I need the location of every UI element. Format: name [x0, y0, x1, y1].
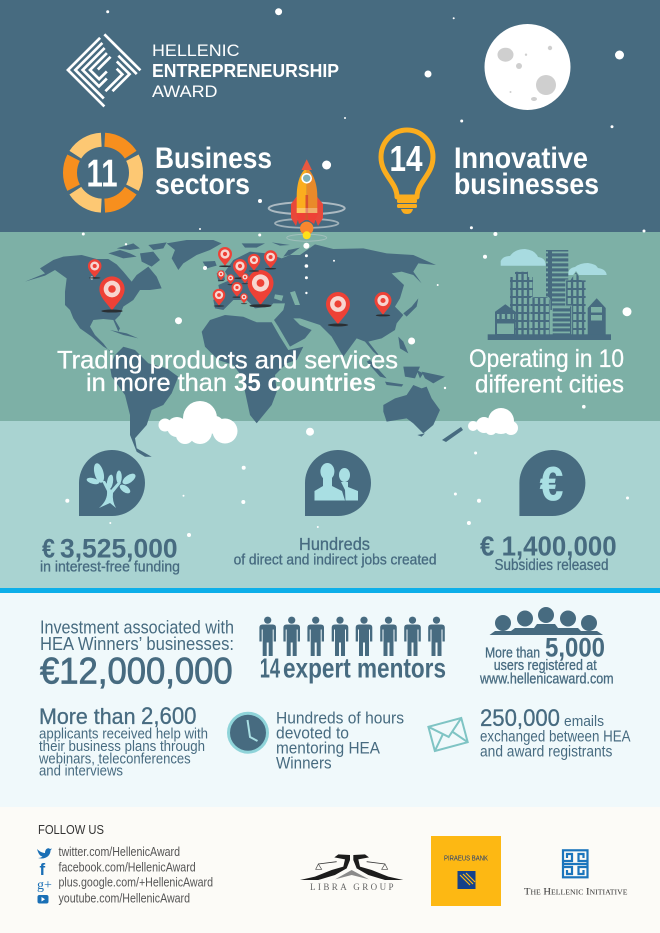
text: mentoring hours: Hundreds of hours: [276, 709, 404, 727]
cloud left: [158, 401, 238, 444]
stat: 11 business sectors: sectors: [155, 168, 250, 201]
text: emails: and award registrants: [480, 744, 613, 761]
icon: twitter: [37, 848, 52, 859]
icon: clock: [227, 712, 269, 754]
text: registered users: [479, 633, 614, 687]
map pins: [88, 247, 392, 326]
africa: [202, 315, 303, 423]
logo: [68, 34, 339, 106]
south america: [110, 347, 178, 457]
logo wordmark: ENTREPRENEURSHIP: [152, 61, 339, 81]
rocket: [269, 159, 345, 241]
logo wordmark: [152, 41, 339, 101]
stat: interest-free funding: in interest-free funding: [40, 559, 180, 576]
text: investment: Investment associated with: [40, 617, 234, 637]
stat: jobs created: [234, 450, 436, 568]
text: registered users: users registered at: [494, 657, 597, 674]
text: applicants: their business plans through: [39, 739, 205, 755]
text: applicants: [38, 703, 208, 780]
stat: interest-free funding: €: [42, 533, 55, 563]
stat: jobs created: Hundreds: [299, 534, 370, 554]
stat: 14 innovative businesses: businesses: [454, 168, 599, 201]
stars: [65, 8, 646, 537]
background: map band: [0, 232, 660, 421]
social links: plus.google.com/+HellenicAward: [58, 875, 213, 890]
text: expert mentors: 14: [260, 653, 280, 684]
social links: youtube.com/HellenicAward: [58, 890, 190, 905]
text: operating cities: [469, 345, 624, 398]
cloud right: [468, 408, 518, 435]
background: investment panel: [0, 593, 660, 807]
logo wordmark: HELLENIC: [152, 41, 240, 60]
north america and greenland: [25, 240, 222, 355]
text: investment: €12,000,000: [40, 650, 233, 691]
text: operating cities: different cities: [475, 370, 624, 398]
background: stats band: [0, 421, 660, 589]
text: trading products: Trading products and services: [57, 346, 398, 374]
text: operating cities: Operating in 10: [469, 345, 624, 373]
text: registered users: 5,000: [545, 633, 605, 663]
stat: interest-free funding: 3,525,000: [60, 533, 178, 563]
background: footer panel: [0, 807, 660, 933]
icon: tree: [79, 450, 145, 516]
icon: envelope: [428, 718, 468, 751]
text: applicants: 2,600: [141, 703, 196, 730]
text: registered users: More than: [485, 644, 540, 661]
icon: city skyline: [488, 249, 611, 340]
sky clouds: [501, 249, 607, 275]
icon: facebook: f: [40, 860, 46, 879]
social links: facebook.com/HellenicAward: [58, 860, 196, 875]
stat: interest-free funding: [40, 450, 180, 576]
logo: libra group: LIBRA GROUP: [310, 882, 394, 892]
icon: crowd: [490, 607, 603, 635]
social links: twitter.com/HellenicAward: [58, 844, 180, 859]
text: emails: 250,000: [480, 705, 560, 732]
logo: piraeus bank: [431, 836, 501, 906]
icon: euro: €: [540, 457, 563, 510]
text: applicants: More than: [39, 704, 136, 729]
text: mentoring hours: devoted to: [276, 724, 349, 742]
logo: the hellenic initiative: The Hellenic Initiative: [524, 887, 628, 897]
blue divider bar: [0, 588, 660, 593]
text: applicants: applicants received help with: [39, 726, 208, 742]
follow us heading: FOLLOW US: [38, 822, 104, 837]
text: trading products: 35 countries: [234, 369, 376, 397]
text: registered users: www.hellenicaward.com: [479, 670, 614, 687]
text: investment: [40, 617, 234, 691]
icon: people: [305, 450, 371, 516]
moon: [484, 24, 570, 110]
logo wordmark: AWARD: [152, 82, 218, 101]
text: mentoring hours: Winners: [276, 754, 332, 772]
icon: google plus: g+: [37, 878, 52, 893]
stat: 14 innovative businesses: Innovative: [454, 142, 588, 175]
text: emails: [480, 705, 631, 761]
icon: youtube: [38, 895, 48, 904]
icon: eight mentors: [259, 617, 445, 656]
text: expert mentors: expert mentors: [283, 653, 446, 684]
icon: light bulb: [381, 130, 433, 214]
stat: 11 business sectors: Business: [155, 142, 272, 175]
text: applicants: webinars, teleconferences: [38, 752, 191, 768]
stat: 14 innovative businesses: 14: [390, 138, 422, 179]
world map: [25, 240, 463, 457]
logo: piraeus bank: PIRAEUS BANK: [444, 856, 488, 863]
stat: jobs created: of direct and indirect jobs created: [234, 551, 436, 568]
stat: 14 innovative businesses: [381, 130, 599, 214]
text: mentoring hours: mentoring HEA: [276, 739, 380, 757]
logo: libra group: [300, 854, 403, 892]
text: emails: emails: [564, 713, 604, 730]
stat: subsidies released: Subsidies released: [494, 557, 608, 574]
text: trading products: [57, 346, 398, 397]
background: night sky band: [0, 0, 660, 233]
text: investment: HEA Winners’ businesses:: [40, 634, 234, 654]
text: mentoring hours: [276, 709, 404, 772]
stat: subsidies released: € 1,400,000: [480, 531, 617, 562]
text: applicants: and interviews: [39, 764, 123, 780]
social links: [37, 844, 213, 905]
stat: subsidies released: [480, 450, 617, 574]
stat: 11 business sectors: [57, 127, 272, 218]
new zealand: [442, 427, 463, 442]
eurasia and oceania: [213, 242, 445, 437]
logo: the hellenic initiative: [524, 850, 628, 897]
stat: 11 business sectors: 11: [86, 153, 118, 196]
logo mark: meander diamond: [68, 34, 140, 106]
text: emails: exchanged between HEA: [480, 729, 631, 746]
icon: segmented ring: [57, 127, 149, 218]
text: trading products: in more than: [86, 369, 227, 397]
